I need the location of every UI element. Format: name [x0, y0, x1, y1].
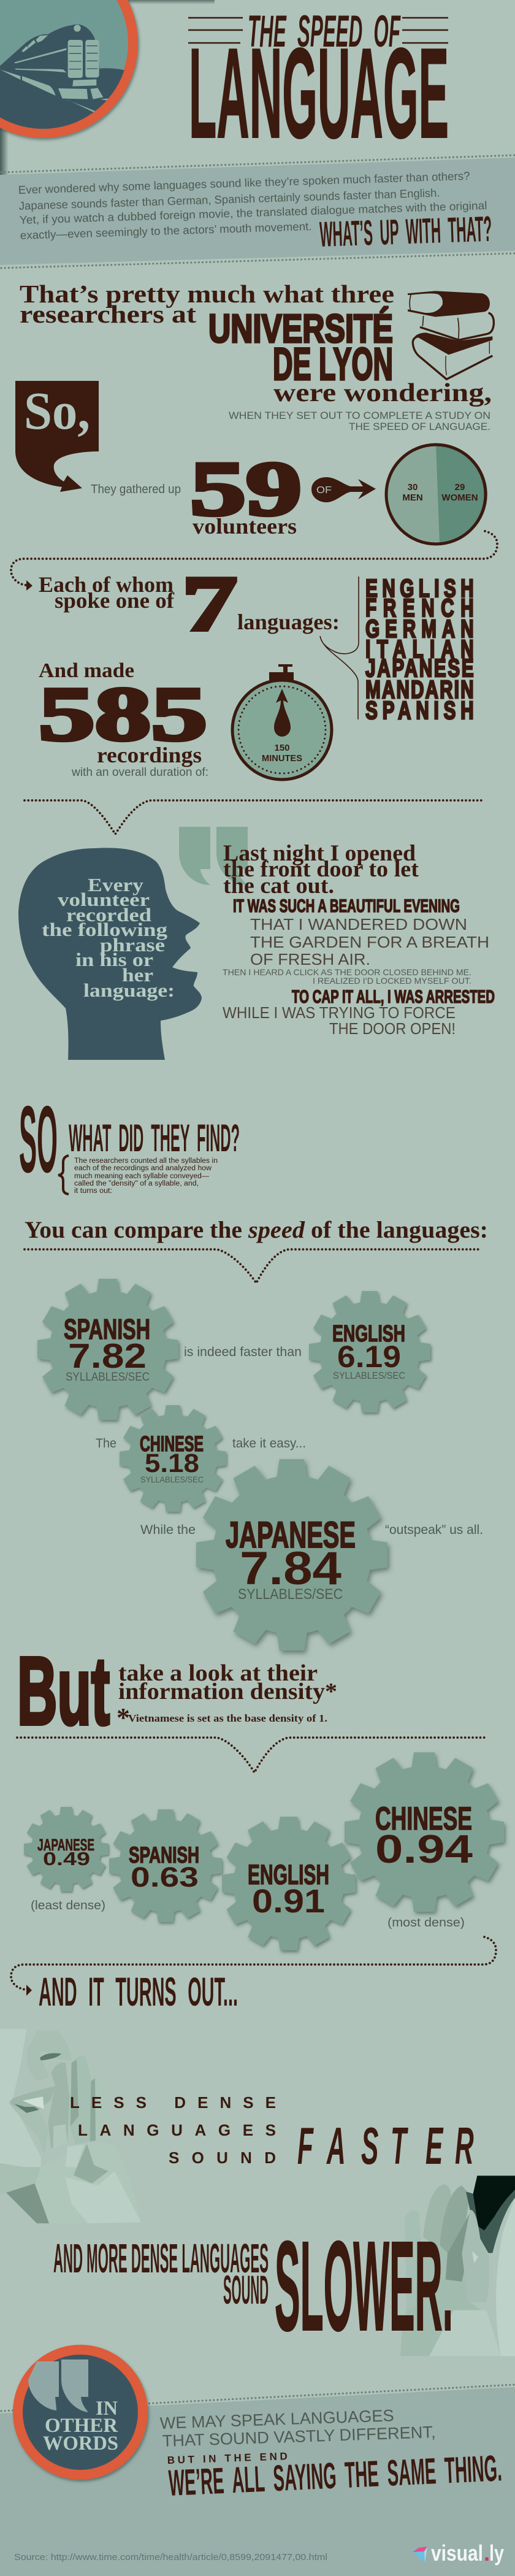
- callout: So speech bubble: So,: [24, 381, 90, 440]
- text: take it easy: take it easy...: [232, 1436, 306, 1451]
- icon: train badge: AND IT TURNS OUT...: [39, 1969, 238, 2014]
- gear: spanish speed: SPANISH: [64, 1313, 150, 1345]
- text: seven languages: [39, 560, 340, 647]
- text: less dense languages sound: LESS DENSE: [70, 2093, 276, 2112]
- text block: conclusion: THAT SOUND VASTLY DIFFERENT,: [162, 2423, 436, 2450]
- number: 585 recordings: And made: [39, 659, 134, 682]
- icon: stopwatch: 150: [274, 743, 290, 753]
- heading: researchers: UNIVERSITÉ: [208, 306, 393, 351]
- text block: recorded phrase: I REALIZED I’D LOCKED MYSELF OUT.: [313, 976, 471, 986]
- gear: chinese density: 0.94: [375, 1827, 473, 1871]
- intro paragraph: exactly—even seemingly to the actors’ mouth movement.: [20, 220, 312, 242]
- gear: japanese density: 0.49: [43, 1848, 90, 1869]
- icon: stopwatch: MINUTES: [262, 753, 302, 764]
- panel: speaking head: recorded: [66, 904, 151, 926]
- panel: speaking head: language:: [83, 979, 175, 1001]
- text block: recorded phrase: OF FRESH AIR.: [250, 950, 370, 968]
- chart: volunteers pie: 30: [408, 482, 418, 493]
- gear: japanese speed: JAPANESE: [226, 1514, 356, 1555]
- badge: in other words: WORDS: [43, 2432, 118, 2455]
- list: languages: FRENCH: [365, 594, 474, 622]
- gear: english density: 0.91: [252, 1883, 325, 1920]
- text: method: called the "density" of a syllable, and,: [74, 1180, 199, 1187]
- gear: english speed: 6.19: [337, 1340, 401, 1374]
- chart: volunteers pie: 29: [455, 482, 465, 493]
- text: faster: FASTER: [297, 2117, 474, 2175]
- arrow: dotted connector to languages: [11, 531, 497, 591]
- logo: visual.ly: [413, 2540, 504, 2566]
- icon: mouth and hand: [0, 2029, 141, 2223]
- number: 585 recordings: 585: [39, 672, 207, 757]
- gear: spanish speed: SYLLABLES/SEC: [66, 1371, 150, 1384]
- text block: recorded phrase: [223, 841, 495, 1038]
- heading: so what did they find: [19, 1086, 240, 1195]
- text: method: The researchers counted all the syllables in: [74, 1157, 218, 1165]
- gear: spanish speed: 7.82: [68, 1336, 147, 1376]
- heading: but information density: *: [116, 1703, 130, 1733]
- gear: english speed: [309, 1291, 430, 1413]
- panel: speaking head: Every: [88, 874, 144, 895]
- text: less dense languages sound: [70, 2093, 276, 2167]
- list: languages: JAPANESE: [365, 654, 474, 682]
- text: more dense languages sound slower: SOUND: [223, 2267, 269, 2312]
- intro paragraph: Japanese sounds faster than German, Spanish certainly sounds faster than English.: [18, 186, 440, 212]
- text block: recorded phrase: WHILE I WAS TRYING TO FORCE: [223, 1003, 456, 1022]
- text block: recorded phrase: THEN I HEARD A CLICK AS THE DOOR CLOSED BEHIND ME.: [223, 967, 471, 977]
- text block: recorded phrase: THE DOOR OPEN!: [329, 1019, 456, 1038]
- text: less dense languages sound: LANGUAGES: [78, 2121, 276, 2139]
- text: method: [74, 1157, 218, 1195]
- icon: train badge: WHAT DID THEY FIND?: [69, 1117, 240, 1160]
- source: Source: http://www.time.com/time/health/article/0,8599,2091477,00.html: [14, 2552, 327, 2563]
- logo: visual.ly: ly: [489, 2540, 504, 2566]
- text block: conclusion: BUT IN THE END: [167, 2450, 288, 2466]
- callout: So speech bubble: [15, 381, 99, 492]
- text: the: The: [96, 1436, 116, 1451]
- text: seven languages: Each of whom: [39, 572, 174, 597]
- logo: visual.ly: visual: [431, 2540, 483, 2566]
- text block: recorded phrase: THAT I WANDERED DOWN: [250, 915, 467, 933]
- gear: spanish density: SPANISH: [129, 1842, 199, 1868]
- text: method: it turns out:: [74, 1187, 112, 1195]
- text block: recorded phrase: the front door to let: [223, 857, 419, 882]
- intro paragraph: [18, 169, 487, 242]
- panel: speaking head: phrase: [100, 934, 165, 956]
- arrow: of: [311, 477, 376, 502]
- heading: researchers: That’s pretty much what three: [20, 280, 394, 308]
- heading: so what did they find: SO: [19, 1086, 58, 1192]
- list: languages: ENGLISH: [365, 574, 474, 602]
- heading: compare the speed: speed: [248, 1217, 305, 1243]
- text: while the: While the: [140, 1523, 196, 1537]
- panel: speaking head: the following: [42, 919, 168, 940]
- heading: compare the speed: of the languages:: [311, 1217, 488, 1243]
- heading: researchers: researchers at: [20, 300, 196, 328]
- number: 585 recordings: [39, 659, 208, 779]
- gear: chinese speed: [120, 1405, 226, 1512]
- intro paragraph: Yet, if you watch a dubbed foreign movie, the translated dialogue matches with the original: [19, 199, 487, 226]
- list: languages: ITALIAN: [365, 635, 474, 663]
- number: 59 volunteers: volunteers: [193, 514, 297, 539]
- gear: spanish speed: [37, 1279, 178, 1420]
- text: method: much meaning each syllable conveyed—: [74, 1173, 210, 1180]
- text: seven languages: languages:: [237, 610, 340, 634]
- heading: but information density: take a look at their: [118, 1660, 318, 1686]
- icon: books: [408, 291, 494, 379]
- text block: conclusion: WE MAY SPEAK LANGUAGES: [159, 2406, 394, 2432]
- text: is indeed faster than: is indeed faster than: [184, 1345, 302, 1359]
- gear: english speed: ENGLISH: [332, 1321, 405, 1347]
- gear: english density: ENGLISH: [248, 1859, 329, 1890]
- text block: recorded phrase: Last night I opened: [223, 841, 416, 866]
- icon: listening hand: [400, 2175, 515, 2356]
- gear: chinese speed: 5.18: [145, 1449, 199, 1478]
- badge: in other words: OTHER: [45, 2415, 118, 2437]
- heading: compare the speed: [25, 1217, 488, 1243]
- text: seven languages: spoke one of: [55, 588, 175, 613]
- gear: chinese speed: SYLLABLES/SEC: [140, 1474, 204, 1484]
- heading: compare the speed: You can compare the: [25, 1217, 242, 1243]
- gear: english speed: SYLLABLES/SEC: [333, 1371, 405, 1381]
- list: languages: MANDARIN: [365, 675, 474, 703]
- heading: but information density: [17, 1638, 337, 1745]
- number: 585 recordings: with an overall duration of:: [71, 766, 208, 779]
- number: 59 volunteers: 59: [190, 447, 302, 532]
- list: languages: SPANISH: [365, 696, 474, 724]
- text: seven languages: 7: [182, 560, 237, 647]
- heading: researchers: DE LYON: [273, 339, 393, 389]
- panel: intro band: [0, 155, 515, 268]
- badge: in other words: IN: [96, 2398, 118, 2420]
- heading: but information density: But: [17, 1638, 110, 1745]
- chart: volunteers pie: [386, 445, 487, 544]
- heading: but information density: Vietnamese is set as the base density of 1.: [128, 1712, 327, 1724]
- heading: researchers: were wondering,: [273, 379, 492, 407]
- arrow: dotted connector to conclusion: [11, 1937, 496, 1996]
- text: outspeak: “outspeak” us all.: [385, 1523, 483, 1537]
- arrow: of: OF: [316, 485, 332, 496]
- label: least dense: (least dense): [31, 1899, 105, 1912]
- text: method: each of the recordings and analyzed how: [74, 1165, 212, 1172]
- heading: researchers: WHEN THEY SET OUT TO COMPLETE A STUDY ON: [229, 410, 490, 421]
- number: 59 volunteers: [190, 447, 302, 539]
- text: they gathered up: They gathered up: [91, 483, 181, 496]
- heading: but information density: information density*: [118, 1679, 337, 1704]
- intro paragraph: Ever wondered why some languages sound like they’re spoken much faster than others?: [18, 169, 470, 196]
- gear: japanese speed: [196, 1459, 387, 1650]
- text: less dense languages sound: SOUND: [169, 2149, 276, 2167]
- panel: conclusion band: [0, 2385, 515, 2576]
- gear: japanese density: JAPANESE: [37, 1836, 94, 1854]
- gear: chinese speed: CHINESE: [140, 1432, 204, 1456]
- panel: speaking head: her: [122, 964, 153, 986]
- text block: recorded phrase: the cat out.: [223, 873, 334, 899]
- text block: recorded phrase: THE GARDEN FOR A BREATH: [250, 933, 489, 951]
- gear: japanese density: [24, 1807, 109, 1892]
- arrow: dotted chevron to gears: [25, 1249, 481, 1283]
- list: languages: GERMAN: [365, 615, 474, 643]
- icon: quote mark: [179, 827, 248, 885]
- panel: speaking head: [18, 848, 202, 1060]
- list: languages: [320, 574, 474, 724]
- heading: researchers: THE SPEED OF LANGUAGE.: [349, 421, 490, 432]
- arrow: dotted chevron to phrase: [25, 800, 482, 834]
- icon: stopwatch: [232, 664, 332, 780]
- logo: visual.ly: .: [484, 2540, 490, 2566]
- gear: english density: [222, 1817, 356, 1950]
- chart: volunteers pie: WOMEN: [441, 493, 478, 503]
- label: most dense: (most dense): [387, 1916, 465, 1930]
- arrow: dotted chevron to density gears: [17, 1738, 485, 1773]
- gear: japanese speed: SYLLABLES/SEC: [238, 1586, 343, 1603]
- gear: japanese speed: 7.84: [240, 1543, 341, 1595]
- heading: researchers: [20, 280, 492, 432]
- text: more dense languages sound slower: [53, 2215, 453, 2358]
- gear: spanish density: 0.63: [131, 1861, 199, 1893]
- panel: speaking head: volunteer: [58, 889, 150, 910]
- gear: chinese density: [345, 1752, 504, 1912]
- badge: in other words: [18, 2350, 143, 2475]
- panel: speaking head: in his or: [75, 949, 153, 970]
- number: 585 recordings: recordings: [97, 743, 202, 767]
- chart: volunteers pie: MEN: [402, 493, 423, 503]
- gear: spanish density: [109, 1809, 222, 1922]
